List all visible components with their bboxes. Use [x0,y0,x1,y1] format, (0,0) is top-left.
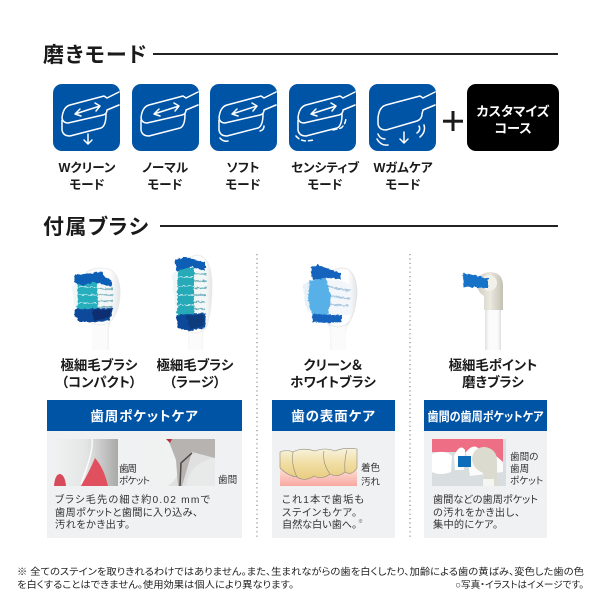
brush names: （コンパクト） [61,375,137,390]
panel heading: 歯間の歯周ポケットケア [428,409,544,424]
body text: 汚れをかき出す。 [55,518,130,531]
illustration caption: 汚れ [361,476,380,488]
mode labels: モード [225,178,261,192]
body text: ブラシ毛先の細さ約0.02 mmで [55,493,210,506]
illustration caption: ポケット [510,476,543,487]
photo: gum pocket [54,439,118,486]
mode labels: モード [147,178,183,192]
body text [55,493,210,531]
mode labels: モード [385,178,421,192]
heading: included brushes: 付属ブラシ [43,215,150,239]
brush names: 極細毛ブラシ [61,357,138,373]
illustration caption: 着色 [361,462,380,474]
icon: W gum care mode [369,84,436,151]
custom course box [467,84,559,151]
illustration caption: 歯周 [510,464,529,475]
brush names: 極細毛ブラシ [157,357,234,373]
brush names: ホワイトブラシ [290,374,376,390]
brush names: クリーン＆ [303,358,362,373]
body text: 歯周ポケットと歯間に入り込み、 [55,507,198,519]
panel heading: 歯周ポケットケア [90,408,199,424]
body text [433,494,538,531]
brush: point [463,272,503,350]
photo captions: 歯周 [119,464,137,475]
illustration caption: 歯間の [510,452,538,463]
body text: ステインもケア。 [282,507,357,519]
mode labels: ノーマル [142,161,189,175]
custom course box: カスタマイズ [476,103,550,119]
brush names: 極細毛ポイント [449,357,537,373]
photo: interdental [140,436,215,488]
mode labels [58,160,433,192]
footnote [17,566,584,591]
brush: clean and white [303,265,357,350]
footnote: を白くすることはできません。使用効果は個人により異なります。 [17,579,294,591]
icon: soft mode [210,84,277,151]
illustration: stained teeth [280,448,357,486]
mode labels: センシティブ [291,160,360,175]
mode labels: Wガムケア [373,161,433,175]
brush names [61,357,537,390]
body text: 歯間などの歯周ポケット [433,494,538,506]
photo captions: ポケット [119,476,150,487]
panel: tooth surface care [272,400,395,538]
body text: 集中的にケア。 [433,518,498,531]
mode labels: モード [307,178,343,192]
icon: plus [443,111,463,131]
brush: compact [72,268,120,350]
mode labels: ソフト [226,161,260,175]
illustration caption [510,452,543,487]
footnote: ※ 全てのステインを取りきれるわけではありません。また、生まれながらの歯を白くしたり、加齢による歯の黄ばみ、変色した歯の色 [17,566,584,578]
icon: normal mode [132,84,199,151]
panel heading: 歯の表面ケア [291,408,376,424]
body text: これ1本で歯垢も [282,493,364,506]
mode labels: Wクリーン [58,161,116,175]
photo captions [119,464,237,487]
custom course box: コース [494,121,532,136]
photo captions: 歯間 [218,475,237,486]
brush names: 磨きブラシ [462,374,524,390]
heading: brushing modes: 磨きモード [43,44,148,67]
mode labels: モード [69,178,105,192]
brush names: （ラージ） [169,375,221,390]
panel: gum pocket care [47,400,242,538]
illustration caption [361,462,380,488]
body text: の汚れをかき出し、 [433,506,520,519]
body text: 自然な白い歯へ。 [282,518,357,531]
brush: large [172,255,212,350]
icon: W clean mode [53,84,120,151]
icon: sensitive mode [289,84,356,151]
body text: ※ [358,519,363,525]
illustration: point brush in teeth [432,439,506,486]
panel: interdental gum pocket care [424,400,547,538]
footnote: ○写真・イラストはイメージです。 [455,579,584,591]
body text [282,493,364,531]
